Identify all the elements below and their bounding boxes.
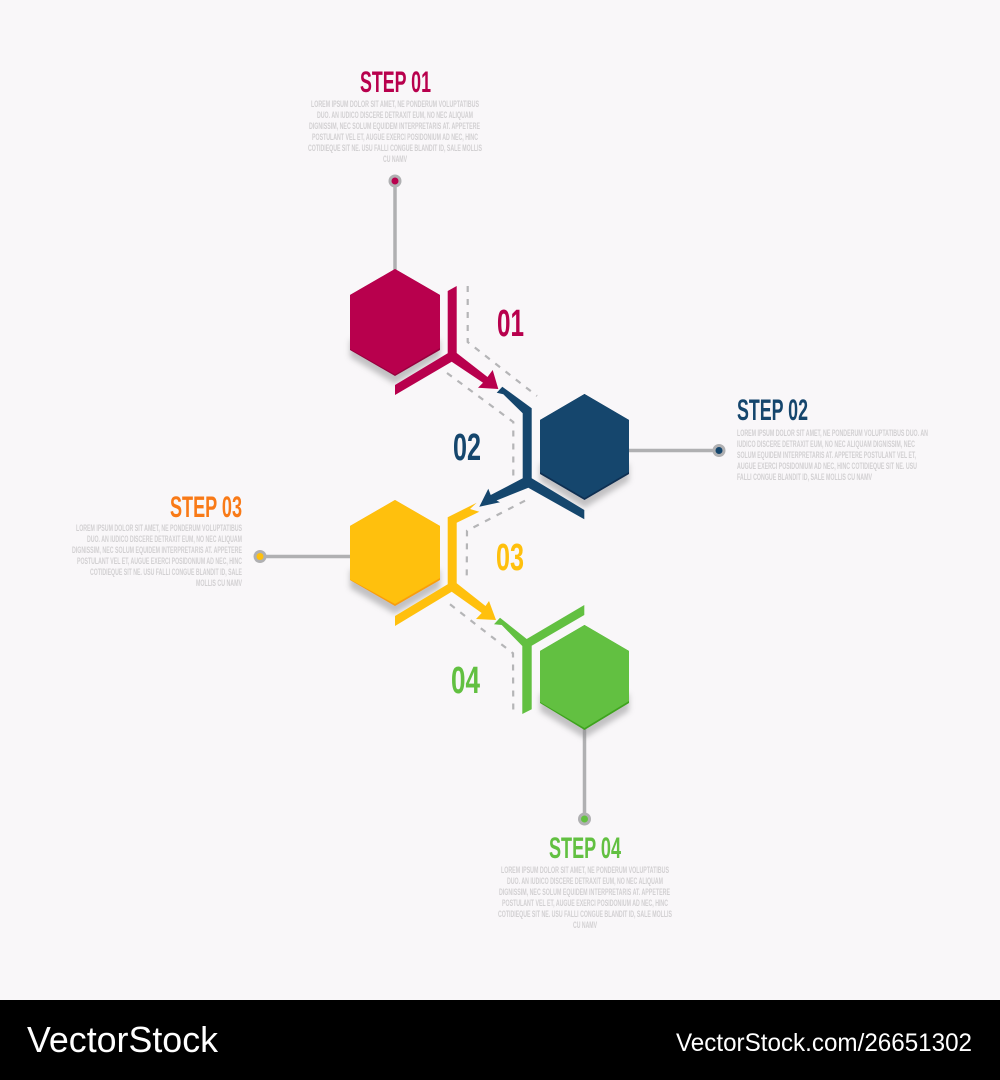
chevron arrow 03: [395, 503, 496, 626]
step 02 connector: [628, 444, 726, 457]
step 03 description: DUO. AN IUDICO DISCERE DETRAXIT EUM, NO NEC ALIQUAM: [87, 534, 242, 545]
step 01 group: [308, 66, 524, 395]
step 03 group: [72, 491, 524, 626]
step 04 description: POSTULANT VEL ET, AUGUE EXERCI POSIDONIUM AD NEC, HINC: [502, 898, 668, 909]
footer logo: VectorStock: [27, 1019, 219, 1060]
step 03 description: LOREM IPSUM DOLOR SIT AMET, NE PONDERUM VOLUPTATIBUS: [76, 523, 242, 534]
number 02: 02: [453, 427, 481, 469]
step 01 description: DUO. AN IUDICO DISCERE DETRAXIT EUM, NO NEC ALIQUAM: [317, 110, 473, 121]
step 04 description: DUO. AN IUDICO DISCERE DETRAXIT EUM, NO NEC ALIQUAM: [507, 876, 663, 887]
step 04 description: [498, 865, 672, 931]
number 04: 04: [451, 660, 480, 702]
step 03 connector: [254, 550, 351, 563]
hexagon 03: [350, 500, 440, 614]
step 04 group: [451, 605, 672, 931]
number 03: 03: [496, 537, 524, 579]
step 01 description: LOREM IPSUM DOLOR SIT AMET, NE PONDERUM VOLUPTATIBUS: [311, 99, 479, 110]
step 03 description: [72, 523, 242, 589]
step 03 heading: STEP 03: [170, 491, 242, 524]
hexagon 02: [540, 394, 629, 508]
step 04 connector: [578, 728, 591, 826]
step 04 description: COTIDIEQUE SIT NE. USU FALLI CONGUE BLANDIT ID, SALE MOLLIS: [498, 909, 672, 920]
step 04 description: LOREM IPSUM DOLOR SIT AMET, NE PONDERUM VOLUPTATIBUS: [501, 865, 669, 876]
step 04 description: DIGNISSIM, NEC SOLUM EQUIDEM INTERPRETARIS AT. APPETERE: [499, 887, 670, 898]
chevron arrow 01: [395, 286, 498, 395]
step 01 heading: STEP 01: [360, 66, 431, 99]
chevron arrow 02: [479, 387, 584, 519]
step 01 description: COTIDIEQUE SIT NE. USU FALLI CONGUE BLANDIT ID, SALE MOLLIS: [308, 143, 482, 154]
step 04 description: CU NAMV: [573, 920, 597, 931]
footer image id: VectorStock.com/26651302: [676, 1029, 972, 1057]
step 01 description: [308, 99, 482, 165]
dashed guide lines: [447, 286, 537, 716]
step 02 description: FALLI CONGUE BLANDIT ID, SALE MOLLIS CU NAMV: [737, 472, 872, 483]
step 02 group: [453, 387, 928, 519]
step 01 description: DIGNISSIM, NEC SOLUM EQUIDEM INTERPRETARIS AT. APPETERE: [309, 121, 480, 132]
hexagon 04: [540, 625, 629, 738]
step 03 description: MOLLIS CU NAMV: [196, 578, 242, 589]
step 04 heading: STEP 04: [549, 832, 621, 865]
chevron arrow 04: [494, 605, 584, 714]
step 01 description: CU NAMV: [383, 154, 407, 165]
step 01 description: POSTULANT VEL ET, AUGUE EXERCI POSIDONIUM AD NEC, HINC: [312, 132, 478, 143]
step 03 description: DIGNISSIM, NEC SOLUM EQUIDEM INTERPRETARIS AT. APPETERE: [72, 545, 242, 556]
step 03 description: POSTULANT VEL ET, AUGUE EXERCI POSIDONIUM AD NEC, HINC: [77, 556, 242, 567]
step 03 description: COTIDIEQUE SIT NE. USU FALLI CONGUE BLANDIT ID, SALE: [90, 567, 242, 578]
hexagon 01: [350, 269, 440, 384]
step 02 description: [737, 428, 928, 483]
footer band: [0, 1000, 1000, 1080]
step 02 heading: STEP 02: [737, 394, 808, 427]
step 01 connector: [388, 174, 402, 270]
number 01: 01: [497, 303, 524, 345]
